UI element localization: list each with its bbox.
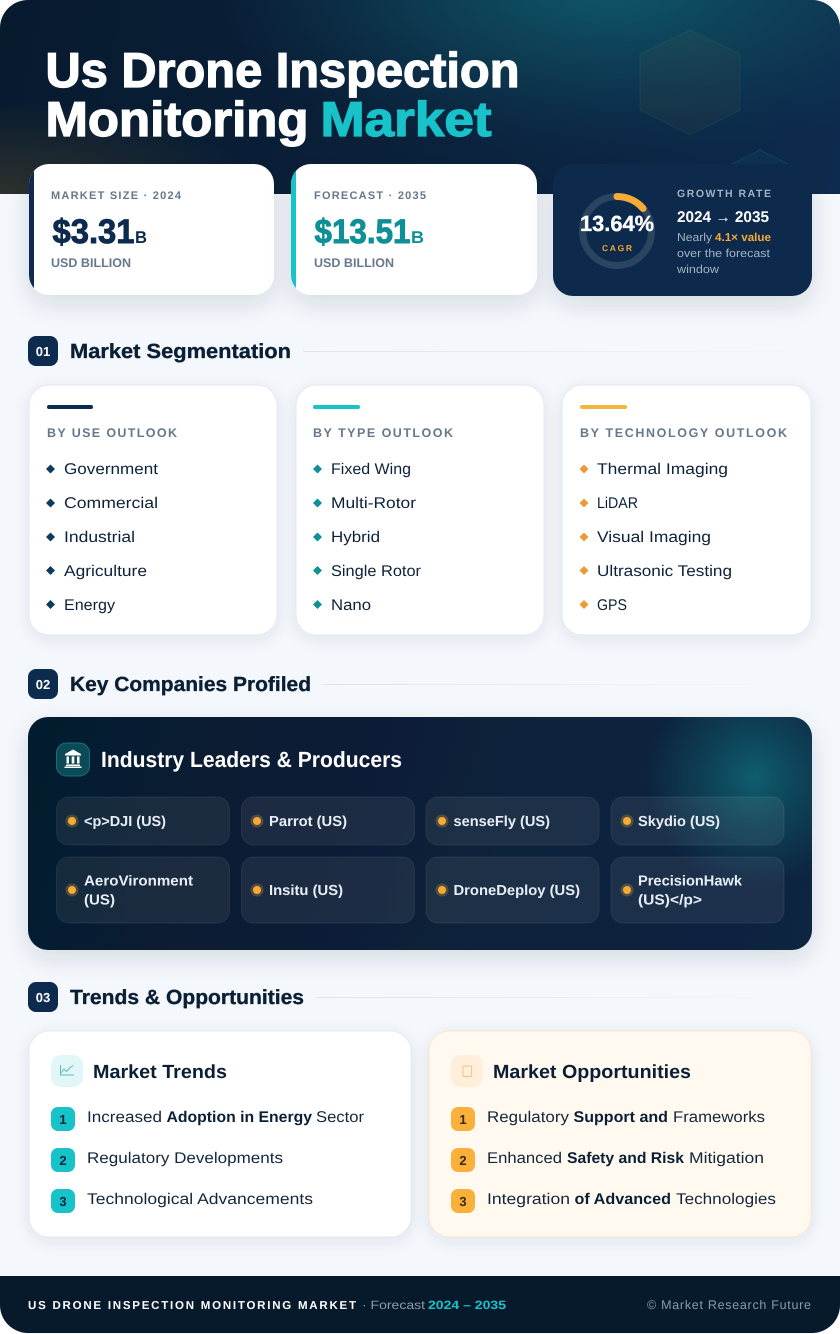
stat card: market size 2024: USD BILLION: [51, 256, 131, 270]
panel: market trends: Regulatory Developments: [87, 1150, 283, 1167]
panel: market opportunities: 1: [459, 1112, 467, 1127]
panel: market opportunities: Frameworks: [673, 1109, 765, 1126]
panel: by use outlook: Industrial: [64, 529, 135, 546]
growth rate card: 2024 → 2035: [677, 209, 769, 226]
panel: by technology outlook: Ultrasonic Testing: [597, 563, 732, 580]
panel: by type outlook: [296, 385, 544, 635]
panel: market opportunities: Enhanced: [487, 1150, 562, 1167]
panel: market opportunities: Mitigation: [689, 1150, 764, 1167]
icon: bank: [56, 743, 90, 776]
panel: by use outlook: Commercial: [64, 495, 158, 512]
header band: [0, 0, 840, 194]
footer: 2024 – 2035: [428, 1298, 506, 1312]
stat card: forecast 2035: USD BILLION: [314, 256, 394, 270]
stat card: market size 2024: MARKET SIZE · 2024: [51, 190, 182, 202]
CAGR ring: 13.64%: [580, 211, 654, 236]
title: Monitoring: [46, 93, 308, 147]
panel: by type outlook: Nano: [331, 597, 371, 614]
section heading: market segmentation: 01: [36, 344, 50, 359]
panel: market opportunities: Support and: [574, 1109, 668, 1126]
CAGR ring: CAGR: [602, 243, 632, 253]
stat card: forecast 2035: B: [411, 228, 424, 247]
growth rate card: Nearly: [677, 232, 712, 244]
title: Us Drone Inspection: [46, 44, 520, 98]
title: [46, 44, 520, 147]
CAGR ring: [580, 196, 654, 266]
title: Market: [320, 93, 492, 147]
panel: by type outlook: Multi-Rotor: [331, 495, 416, 512]
panel: market trends: Increased: [87, 1109, 162, 1126]
stat card: market size 2024: $3.31: [52, 213, 134, 251]
panel: market opportunities: Market Opportunities: [493, 1062, 691, 1083]
panel: by technology outlook: Thermal Imaging: [597, 461, 728, 478]
panel: by technology outlook: Visual Imaging: [597, 529, 711, 546]
panel: by technology outlook: LiDAR: [597, 495, 638, 512]
stat card: forecast 2035: [291, 164, 537, 295]
panel: industry leaders: PrecisionHawk: [638, 874, 743, 890]
panel: market opportunities: 3: [459, 1194, 467, 1209]
panel: market trends: 3: [59, 1194, 67, 1209]
panel: by type outlook: Hybrid: [331, 529, 380, 546]
growth rate card: over the forecast: [677, 248, 771, 260]
growth rate card: [553, 164, 812, 296]
panel: market opportunities: 2: [459, 1153, 467, 1168]
stat card: forecast 2035: FORECAST · 2035: [314, 190, 426, 202]
panel: by use outlook: Agriculture: [64, 563, 147, 580]
panel: by use outlook: Energy: [64, 597, 115, 614]
section heading: key companies: [28, 669, 812, 699]
panel: by use outlook: [29, 385, 277, 635]
panel: market opportunities: Regulatory: [487, 1109, 569, 1126]
panel: by type outlook: BY TYPE OUTLOOK: [313, 426, 453, 440]
panel: market trends: Sector: [316, 1109, 364, 1126]
panel: industry leaders: [28, 717, 812, 950]
growth rate card: 4.1× value: [715, 232, 771, 244]
panel: by technology outlook: GPS: [597, 597, 627, 614]
panel: by type outlook: Single Rotor: [331, 563, 421, 580]
panel: market opportunities: [429, 1031, 811, 1237]
panel: market trends: Market Trends: [93, 1062, 227, 1083]
panel: industry leaders: <p>DJI (US): [84, 814, 166, 830]
panel: by use outlook: Government: [64, 461, 159, 478]
panel: industry leaders: (US): [84, 892, 115, 908]
panel: market trends: Technological Advancements: [87, 1191, 313, 1208]
panel: industry leaders: Parrot (US): [269, 814, 347, 830]
panel: by technology outlook: [562, 385, 811, 635]
section heading: market segmentation: [28, 336, 812, 366]
panel: industry leaders: DroneDeploy (US): [454, 883, 580, 899]
panel: market trends: 1: [59, 1112, 67, 1127]
panel: market opportunities: of Advanced: [574, 1191, 671, 1208]
panel: industry leaders: Skydio (US): [638, 814, 720, 830]
section heading: market segmentation: Market Segmentation: [70, 340, 291, 363]
footer: · Forecast: [362, 1298, 426, 1312]
section heading: trends: 03: [36, 990, 50, 1005]
panel: industry leaders: AeroVironment: [84, 874, 193, 890]
stat card: market size 2024: B: [135, 228, 147, 247]
panel: market trends: 2: [59, 1153, 67, 1168]
company chips: [56, 797, 784, 923]
panel: industry leaders: Industry Leaders & Producers: [101, 747, 402, 772]
panel: industry leaders: Insitu (US): [269, 883, 343, 899]
panel: industry leaders: (US)</p>: [638, 892, 702, 908]
panel: market trends: [29, 1031, 411, 1237]
stat card: forecast 2035: $13.51: [314, 213, 410, 251]
icon: chart: [51, 1055, 83, 1087]
panel: by technology outlook: BY TECHNOLOGY OUTLOOK: [580, 426, 787, 440]
section heading: trends: Trends & Opportunities: [70, 986, 304, 1009]
growth rate card: GROWTH RATE: [677, 188, 771, 200]
section heading: trends: [28, 982, 812, 1012]
growth rate card: window: [676, 264, 720, 276]
panel: market opportunities: Integration: [487, 1191, 570, 1208]
panel: market opportunities: Technologies: [676, 1191, 776, 1208]
panel: by use outlook: BY USE OUTLOOK: [47, 426, 177, 440]
section heading: key companies: 02: [36, 677, 50, 692]
footer: [0, 1276, 840, 1333]
panel: industry leaders: senseFly (US): [454, 814, 550, 830]
footer: © Market Research Future: [647, 1298, 811, 1312]
stat card: market size 2024: [29, 164, 274, 295]
section heading: key companies: Key Companies Profiled: [70, 673, 311, 696]
panel: market trends: Adoption in Energy: [166, 1109, 312, 1126]
panel: market opportunities: Safety and Risk: [567, 1150, 684, 1167]
icon: opportunity placeholder: [451, 1055, 483, 1087]
panel: by type outlook: Fixed Wing: [331, 461, 411, 478]
footer: US DRONE INSPECTION MONITORING MARKET: [28, 1300, 356, 1312]
